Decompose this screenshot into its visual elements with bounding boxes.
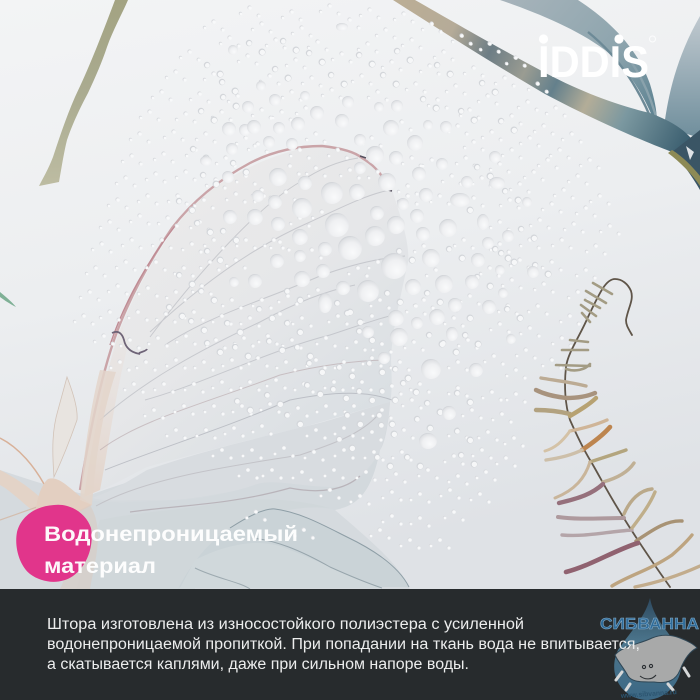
flower centre with tan petals: [0, 370, 116, 589]
watermark: Sibvanna drop logo: [600, 598, 699, 700]
ribbon leaf: diagonal band to upper right: [393, 0, 694, 152]
water droplets: fine droplets: [74, 6, 619, 548]
description text: а скатывается каплями, даже при сильном напоре воды.: [47, 656, 469, 673]
fern fronds, middle: [541, 378, 586, 386]
wing dark curl: [112, 332, 147, 354]
water droplets: large droplets: [200, 23, 539, 449]
wing veins: [100, 158, 405, 470]
watermark url: www.sibvanna.ru: [620, 689, 677, 700]
knot and lower stem at right edge: [668, 130, 700, 190]
heading: waterproof material: [44, 523, 298, 578]
leaf: upper right blue-grey blade: [500, 0, 657, 126]
lower grey wash under the wing and petals: [0, 402, 410, 589]
description text: Штора изготовлена из износостойкого полиэстера с усиленной: [47, 616, 524, 633]
watermark feet: [616, 668, 689, 690]
butterfly wing: upper lobe: [80, 146, 408, 497]
watermark bath: [615, 635, 697, 682]
heading: waterproof material: материал: [44, 555, 156, 578]
leaf: right edge blue-grey blade: [664, 16, 700, 138]
fern fronds, top: [556, 283, 612, 370]
fern fronds, lower: [558, 517, 624, 519]
description text: [47, 616, 640, 673]
wing leading edge: [80, 146, 384, 490]
fern stem: [565, 279, 670, 587]
pink badge blob: [16, 505, 92, 582]
stem: top left olive leaf: [39, 0, 128, 186]
watermark brand name: СИБВАННА: [600, 616, 699, 633]
description text: водонепроницаемой пропиткой. При попадании на ткань вода не впитывается,: [47, 636, 640, 653]
dark description panel: [0, 589, 700, 700]
small green leaf tip at left edge: [0, 292, 16, 307]
watermark face: [640, 664, 656, 679]
heading: waterproof material: Водонепроницаемый: [44, 523, 298, 546]
fern sprig: [536, 279, 700, 587]
butterfly wing: lower lobe, blue-grey: [60, 415, 409, 589]
watermark drop: [614, 598, 681, 700]
butterfly wing: middle lobe: [92, 402, 390, 500]
iddis logo: IDDIS: [538, 38, 649, 87]
thin stems joining at knot: [588, 32, 658, 126]
water droplets: medium droplets: [169, 41, 548, 466]
